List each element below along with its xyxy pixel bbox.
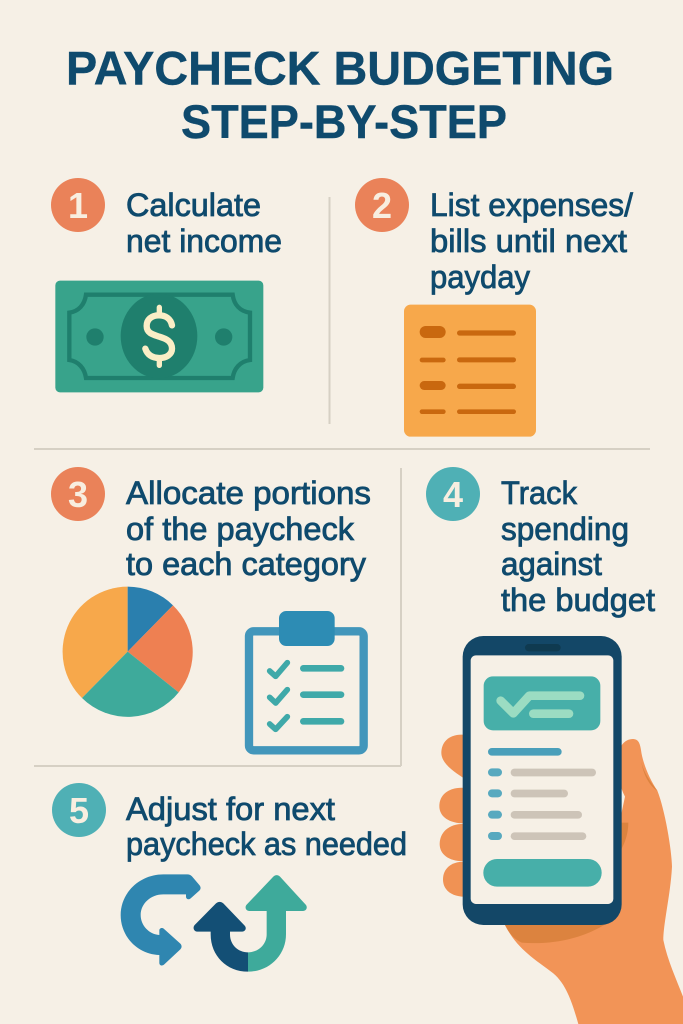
- step 5 number badge: 5: [69, 790, 89, 831]
- icon: clipboard checklist: [249, 611, 364, 750]
- step 4 number badge: 4: [443, 474, 463, 515]
- step 5 text: paycheck as needed: [126, 826, 407, 862]
- pie chart: [63, 587, 193, 717]
- step 3 number badge: [51, 467, 105, 521]
- step 1 number badge: 1: [68, 185, 88, 226]
- step 1 number badge: [51, 178, 105, 232]
- step 4 text: Track: [501, 475, 578, 511]
- step 1 text: Calculate: [126, 187, 261, 223]
- title: [66, 42, 614, 148]
- step 3 text: of the paycheck: [126, 511, 355, 547]
- step 3 number badge: 3: [68, 474, 88, 515]
- step 2 text: List expenses/: [430, 187, 633, 223]
- step 2 number badge: [355, 178, 409, 232]
- step 3 text: [126, 475, 371, 582]
- title: STEP-BY-STEP: [181, 95, 507, 148]
- hand: [439, 735, 683, 1024]
- icon: hand holding phone: [439, 636, 683, 1024]
- step 2 text: [430, 187, 633, 295]
- step 5 number badge: [52, 783, 106, 837]
- icon: adjustment arrows: [121, 874, 307, 972]
- step 2 text: bills until next: [430, 223, 627, 259]
- phone: [463, 636, 622, 925]
- step 3 text: Allocate portions: [126, 475, 371, 511]
- step 1 text: [126, 187, 282, 259]
- step 4 text: against: [501, 546, 602, 582]
- panel: step 5: [52, 783, 407, 972]
- step 4 text: the budget: [501, 582, 655, 618]
- icon: expense list: [404, 305, 536, 437]
- step 5 text: Adjust for next: [126, 791, 335, 827]
- title: PAYCHECK BUDGETING: [66, 42, 614, 94]
- icon: dollar bill: [55, 281, 263, 392]
- panel: step 4: [426, 467, 683, 1024]
- panel: step 3: [51, 467, 371, 750]
- step 5 text: [126, 791, 407, 862]
- step 4 text: spending: [501, 511, 629, 547]
- step 1 text: net income: [126, 223, 282, 259]
- step 2 number badge: 2: [372, 185, 392, 226]
- panel: step 1: [51, 178, 282, 392]
- step 2 text: payday: [430, 259, 530, 295]
- step 3 text: to each category: [126, 546, 366, 582]
- step 4 number badge: [426, 467, 480, 521]
- panel: step 2: [355, 178, 633, 437]
- step 4 text: [501, 475, 655, 618]
